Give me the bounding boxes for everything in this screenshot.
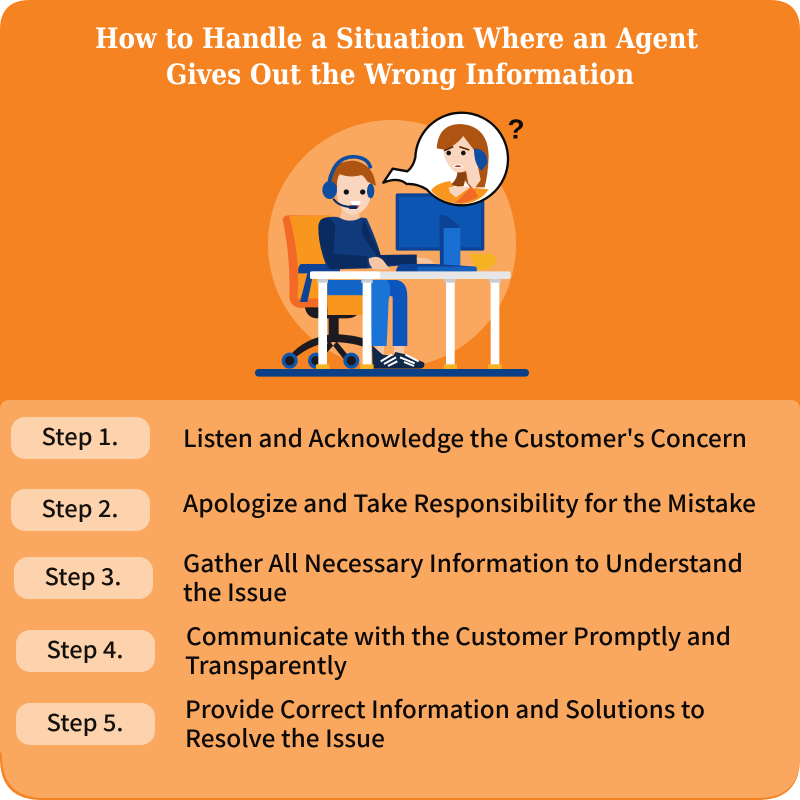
step 2: Apologize and Take Responsibility for the Mistake — [183, 484, 756, 519]
headset — [329, 157, 371, 183]
phone — [474, 149, 487, 171]
step 3: the Issue — [183, 573, 287, 608]
shoes — [372, 345, 424, 369]
title — [95, 22, 698, 91]
step 2 — [11, 484, 756, 531]
head — [336, 172, 372, 215]
step 5: Resolve the Issue — [185, 719, 385, 754]
step 5: Provide Correct Information and Solutions to — [185, 690, 705, 725]
illustration: agent at desk with customer bubble — [255, 113, 529, 377]
step 4 — [16, 617, 731, 681]
computer monitor — [396, 193, 484, 272]
step 3: Step 3. — [44, 558, 122, 592]
step 3: Gather All Necessary Information to Understand — [183, 544, 743, 579]
step 2: Step 2. — [42, 490, 118, 524]
floor line — [255, 369, 529, 377]
title: How to Handle a Situation Where an Agent — [95, 22, 698, 55]
step 1: Step 1. — [42, 418, 118, 452]
agent — [318, 157, 435, 369]
background circle — [268, 120, 516, 368]
office chair — [282, 215, 367, 369]
customer face and hand — [443, 136, 481, 189]
customer neck — [450, 172, 467, 187]
hair — [327, 161, 376, 190]
seat and legs — [327, 280, 364, 295]
step 4: Step 4. — [46, 631, 124, 665]
step 1: Listen and Acknowledge the Customer's Concern — [183, 419, 747, 454]
mouth — [351, 201, 361, 209]
customer hair — [437, 124, 489, 187]
step 4: Communicate with the Customer Promptly and — [186, 617, 731, 652]
torso — [318, 217, 417, 268]
customer shoulders — [431, 181, 489, 204]
eyes — [344, 189, 349, 195]
step 3 — [14, 544, 743, 608]
neck — [340, 207, 359, 222]
hands — [369, 257, 390, 269]
step 4: Transparently — [185, 646, 347, 681]
title: Gives Out the Wrong Information — [166, 58, 634, 91]
desk — [310, 271, 511, 369]
question mark: ? — [507, 114, 525, 145]
coffee cup — [469, 254, 496, 270]
step 1 — [11, 417, 747, 459]
speech bubble with customer — [383, 113, 508, 205]
panel: steps — [0, 400, 800, 798]
step 5 — [16, 690, 705, 754]
step 5: Step 5. — [46, 704, 124, 738]
